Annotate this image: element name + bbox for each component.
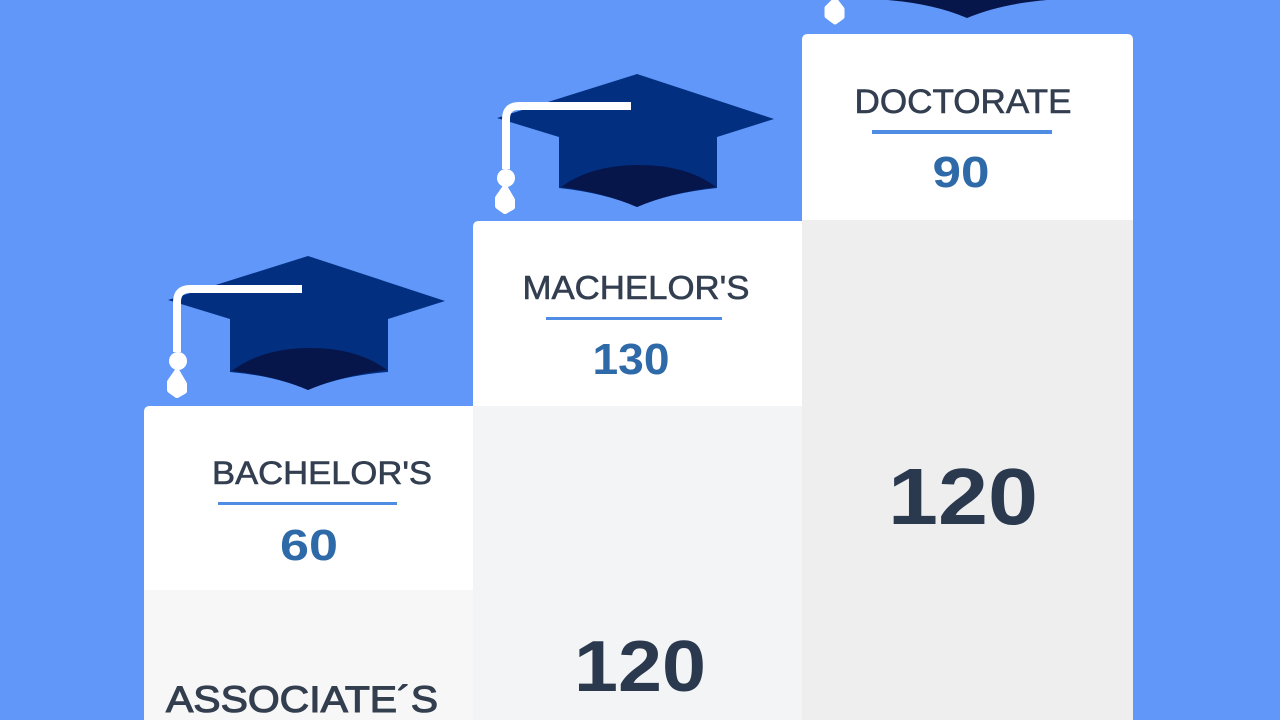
label: associate's: ASSOCIATE´S [166,679,438,720]
value: 60: 60 [280,521,338,570]
divider: bachelor's [218,502,397,505]
step column: associate's and bachelor's [144,406,473,720]
icon: graduation cap on bachelor's [168,256,445,395]
panel: associate's lower block [144,590,473,720]
panel: bachelor's card [144,406,473,590]
step column: master's [473,221,802,720]
value: 90: 90 [932,148,990,197]
label: doctorate: DOCTORATE [854,83,1072,121]
label: machelor's: MACHELOR'S [522,269,750,306]
label: bachelor's: BACHELOR'S [212,455,432,491]
panel: master's card [473,221,802,406]
panel: doctorate lower block [802,220,1133,720]
panel: master's lower block [473,406,802,720]
value: 120: 120 [888,452,1038,541]
value: 130: 130 [592,335,670,384]
step column: doctorate [802,34,1133,720]
icon: graduation cap on doctorate [827,0,1047,22]
divider: doctorate [872,130,1052,134]
panel: doctorate card [802,34,1133,220]
value: 120: 120 [574,627,706,707]
divider: master's [546,317,722,320]
icon: graduation cap on master's [497,74,774,211]
